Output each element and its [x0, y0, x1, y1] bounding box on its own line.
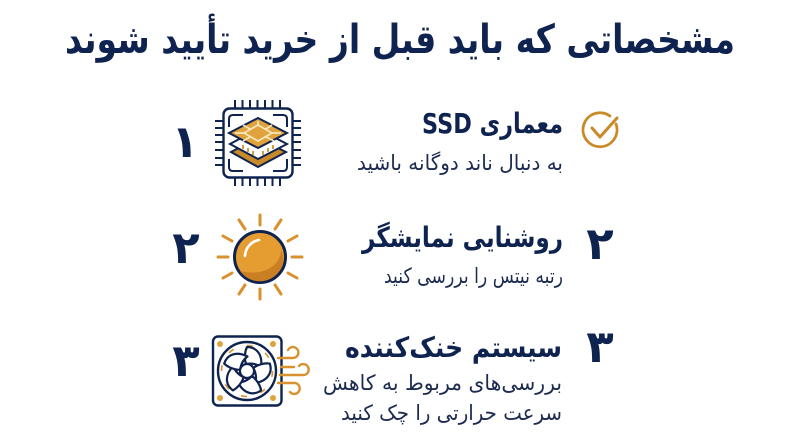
- text: nits: رتبه نیتس را بررسی کنید: [384, 264, 563, 288]
- icon: cooling fan: [213, 336, 309, 406]
- number 2 left: ۲: [172, 221, 200, 274]
- icon: checkmark: [583, 113, 617, 147]
- heading: SSD architecture: معماری SSD: [422, 107, 563, 140]
- number 3 right: ۳: [586, 320, 614, 373]
- icon: SSD chip: [215, 100, 301, 186]
- heading: display brightness: روشنایی نمایشگر: [360, 221, 563, 254]
- number 1 left: ۱: [171, 115, 199, 168]
- heading: cooling system: سیستم خنک‌کننده: [345, 331, 562, 364]
- text: dual NAND: به دنبال ناند دوگانه باشید: [357, 151, 563, 175]
- text: throttling line 2: سرعت حرارتی را چک کنید: [341, 401, 562, 425]
- text: throttling line 1: بررسی‌های مربوط به کاهش: [323, 371, 562, 395]
- icon: sun: [218, 215, 302, 299]
- number 2 right: ۲: [586, 217, 614, 270]
- number 3 left: ۳: [172, 334, 200, 387]
